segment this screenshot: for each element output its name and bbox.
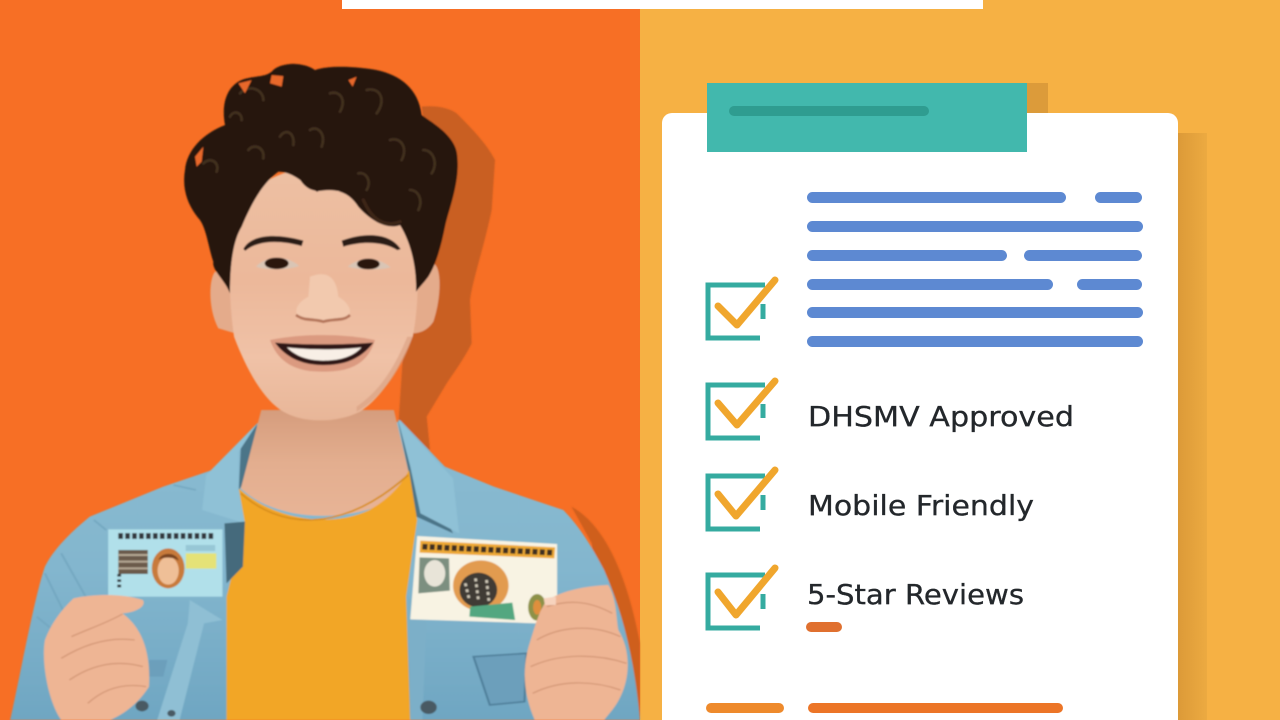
label: Mobile Friendly: Mobile Friendly [808,490,1034,522]
photo: teen holding two ID cards [10,64,640,720]
label: DHSMV Approved: DHSMV Approved [808,401,1074,433]
blue placeholder text lines [807,192,1143,347]
orange gaps in hair [195,75,357,167]
icon: checkbox 3 [708,470,775,529]
left hand [44,595,149,720]
left eyebrow [243,236,303,251]
jaw shading [357,337,413,412]
orange footer bar long [808,703,1063,713]
left placket [157,600,222,720]
ID card left [108,529,222,597]
head [184,64,458,420]
jacket buttons [136,701,437,717]
ID card right [410,536,557,623]
right eye [348,259,391,270]
left sleeve folds [37,485,196,630]
document shadow [1178,133,1207,720]
face [230,167,418,420]
right eyebrow [342,235,401,250]
panel: orange left background [0,0,640,720]
tab dark line [729,106,929,116]
panel: checklist document [662,83,1207,720]
orange footer bar short [706,703,784,713]
curl over the forehead [298,167,325,189]
smile [270,335,375,372]
t-shirt collar seam [241,475,408,520]
left ear [210,272,235,333]
hair [184,64,458,293]
orange accent dash [806,622,842,632]
body [10,410,640,720]
left eye [256,258,299,269]
label: 5-Star Reviews: 5-Star Reviews [807,579,1024,611]
title bar (white, cropped at the top) [342,0,983,9]
icon: checkbox 4 [708,568,775,628]
right ear [412,263,440,333]
neck [241,410,408,516]
right placket [408,597,427,720]
hair curls [203,88,435,210]
shadow right of jacket [571,507,640,720]
person's shadow on the wall [397,106,495,450]
dark inner collar [239,420,453,533]
white sheet [662,113,1178,720]
clipboard tab shadow [1026,83,1048,113]
left collar [202,423,258,523]
icon: checkbox 2 [708,381,775,438]
right chest pocket [473,653,527,705]
teal header tab [707,83,1027,152]
right hand [525,585,628,720]
nose [296,274,350,321]
left chest pocket stitching [149,660,167,677]
denim jacket [10,420,640,720]
icon: checkbox 1 [708,280,775,338]
right collar [398,419,459,533]
yellow t-shirt [227,470,417,720]
dark detail beside left card [224,522,245,583]
panel: amber right background [640,0,1280,720]
